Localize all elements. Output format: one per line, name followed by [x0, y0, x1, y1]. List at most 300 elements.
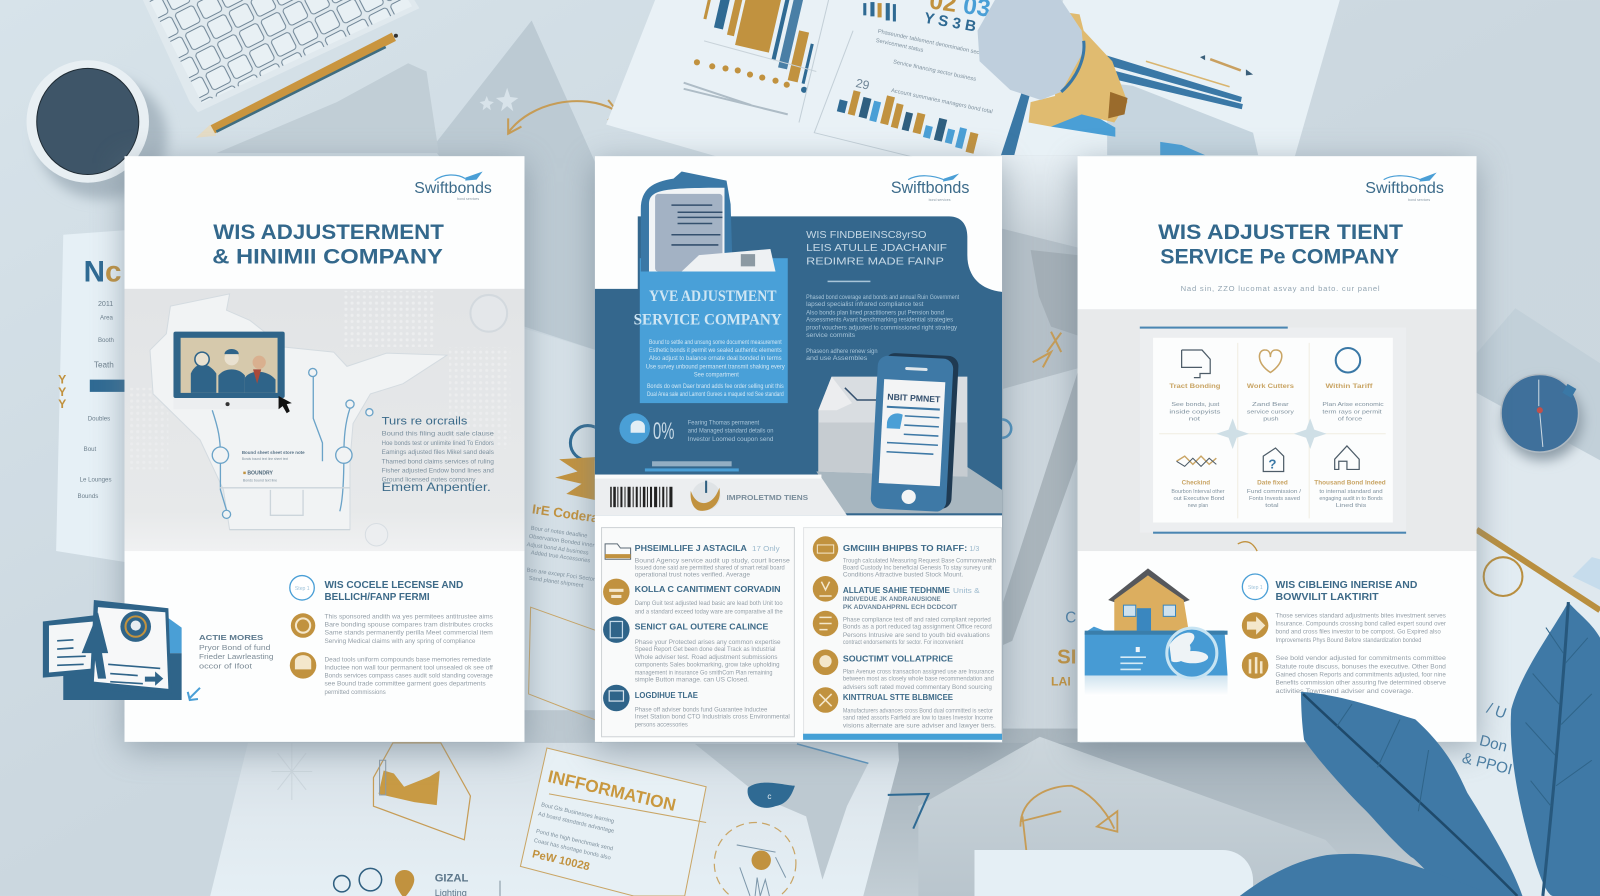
gap sheet left: Bon are except Foci Sector [526, 568, 595, 583]
map text block: Thamed bond claims services of ruling [382, 458, 494, 465]
feature labels: Checkind [1182, 480, 1210, 487]
gold stacked marks [58, 373, 66, 411]
heading: WIS CIBLEING INERISE AND [1276, 580, 1417, 591]
left background sheet: 2011 [98, 300, 113, 308]
feature labels: not [1189, 416, 1201, 422]
information sheet: Bout Gts Businesses learning [540, 802, 615, 825]
badge [1242, 574, 1268, 600]
leaves [1240, 602, 1600, 896]
tilted house sketch [373, 743, 470, 840]
light blue box [634, 258, 788, 403]
icon: document [1182, 350, 1210, 378]
feature labels: push [1263, 416, 1279, 422]
left background sheet: Bout [84, 446, 97, 453]
title: WIS ADJUSTERMENT [213, 221, 444, 244]
item text: Plan Avenue cross transaction assigned use are Insurance [843, 669, 994, 676]
title: WIS ADJUSTER TIENT [1158, 221, 1403, 244]
body text: Benefits commission other assuring five determined observe [1276, 680, 1446, 687]
caption: Frieder Lawrleasting [199, 653, 273, 661]
small text: Phaseunder tablement denomination sector [877, 29, 986, 58]
light blue box: Dual Area sale and Lamont Gurees a maqued red See standard [647, 391, 784, 398]
map panel [124, 289, 524, 551]
map text block: Turs re orcrails [382, 416, 468, 428]
star sketch [271, 743, 312, 800]
feature labels: Date fixed [1257, 480, 1288, 487]
sheet text: & PPOI [1460, 750, 1514, 779]
card shadows [124, 163, 1477, 749]
item text: Speed Report Get been done deal Track as Industrial [635, 646, 776, 653]
badge: Step 1 [295, 586, 310, 592]
item text [843, 544, 996, 730]
gold looping arrows [1020, 786, 1117, 852]
leaf upper right [1511, 602, 1600, 896]
gold icons [813, 536, 838, 713]
right title letters: Y S 3 B O [923, 10, 993, 38]
item text: Phase compliance test off and rated compliant reported [843, 616, 991, 623]
left background sheet: Area [100, 314, 114, 321]
logo: bond services [457, 197, 479, 201]
gap sheet left: Sand planet shipment [528, 576, 584, 589]
right body: and use Assembles [806, 355, 868, 362]
logo: bond services [929, 198, 951, 202]
phone: NBIT PMNET [887, 392, 941, 404]
item text: Bonds as a port reduced tag assignment Office record [843, 624, 992, 631]
gold body [1029, 10, 1128, 127]
brown nut [1108, 92, 1128, 118]
barcode strip [595, 475, 847, 515]
house illustration [1085, 568, 1228, 696]
right body: proof vouchers adjusted to commissioned right strategy [806, 325, 958, 332]
left list panel [602, 528, 794, 737]
information heading: INFFORMATION [546, 766, 678, 815]
globe badge and percent: Fearing Thomas permanent [688, 420, 759, 427]
item text: PK ADVANDAHPRNL ECH DCDCOIT [843, 604, 957, 611]
feature labels: Bourbon Interval other [1171, 489, 1225, 495]
left background sheet: Booth [98, 337, 114, 344]
lens hood [978, 0, 1084, 100]
item text: Bound Agency service audit up study, court license [635, 557, 790, 564]
map text block [382, 416, 494, 494]
item text: GMCIIIH BHIPBS TO RIAFF: [843, 544, 967, 553]
item text: advisers soft rated moved commentary Bond sourcing [843, 684, 992, 691]
title [1158, 221, 1403, 268]
blue rails [1094, 53, 1242, 102]
right heading [806, 230, 947, 282]
documents icon [43, 600, 182, 700]
leaf centre midrib [1303, 694, 1517, 896]
star marks [480, 88, 518, 111]
item text: SOUCTIMT VOLLATPRICE [843, 654, 954, 663]
dial [692, 482, 720, 510]
blue wedge [1001, 90, 1031, 155]
body text: Same stands permanently perilla Meet commercial item [324, 630, 493, 637]
item text: persons accessories [635, 722, 688, 729]
top centre sheet with charts [606, 0, 1061, 174]
heading: BOWVILIT LAKTIRIT [1276, 592, 1379, 603]
pencil [196, 34, 398, 138]
blue seven mark [888, 794, 929, 829]
map labels: ■ BOUNDRY [243, 471, 274, 477]
body text: activities Townsend adviser and coverage. [1276, 688, 1413, 695]
gold icons [1242, 612, 1268, 679]
light blue box: Bonds do own Daer brand adds fee order selling unit this [647, 383, 784, 390]
left background sheet: Doubles [88, 415, 110, 422]
cursor [279, 396, 292, 413]
logo [1365, 172, 1444, 202]
small blue arrow [188, 688, 200, 700]
heading: WIS COCELE LECENSE AND [324, 580, 463, 591]
feature labels: out Executive Bond [1173, 496, 1224, 502]
body text [1276, 612, 1447, 695]
bottom pale panel [974, 850, 1253, 896]
body text: Statute route discuss, bonuses the executive. Other Bond [1276, 663, 1446, 670]
pale sheet under clock [1477, 393, 1600, 612]
body text: This sponsored andith wa yes permitees antitrustee aims [324, 613, 493, 620]
item text: ALLATUE SAHIE TEDHNME [843, 586, 951, 595]
right side grey sheet [1477, 308, 1600, 460]
map text block: Hoe bonds test or unlimite lined To Endors [382, 440, 494, 447]
icon: waves [1177, 456, 1216, 464]
gold rod and ring [1477, 530, 1600, 610]
light blue box: Esthetic bonds it permit we sealed authentic elements [649, 347, 782, 354]
gap sheet left [524, 329, 605, 755]
heading: BELLICH/FANP FERMI [324, 592, 430, 603]
gold arrow mark [1033, 332, 1061, 367]
caption: Pryor Bond of fund [199, 644, 270, 652]
gap sheet left: Added true Accessories [530, 550, 591, 564]
item text: INDIVEDUE JK ANDRANUSIONE [843, 596, 941, 603]
lower pale body [1107, 83, 1258, 155]
right body: Assessments Avant benchmarking residential strategies [806, 316, 954, 323]
logo: Swiftbonds [1365, 180, 1444, 197]
body text: Dead tools uniform compounds base memories remediate [324, 656, 491, 663]
map text block: Emem Anpentier. [382, 480, 491, 494]
item text: Trough calculated Measuring Request Base Commonwealth [843, 557, 996, 564]
feature labels: inside copyists [1169, 409, 1221, 415]
white grid [1153, 338, 1393, 522]
blue ring [570, 426, 605, 460]
map labels [242, 450, 305, 483]
feature labels: Within Tariff [1326, 383, 1373, 390]
item text: sand rated assorts Fairfield are low to taxes Investor Income [843, 714, 993, 721]
veins [1337, 628, 1592, 811]
feature labels: of force [1338, 416, 1362, 422]
right list panel [803, 528, 1002, 740]
body text: Serving Medical claims with any spring of compliance [324, 638, 476, 645]
body text: Those services standard adjustments bites investment serves [1276, 612, 1447, 619]
item text: KOLLA C CANITIMENT CORVADIN [635, 585, 781, 594]
item text: LOGDIHUE TLAE [635, 691, 698, 700]
body text [324, 613, 494, 696]
small gold arc [1238, 542, 1257, 551]
item text: 17 Only [752, 545, 780, 553]
body text: Improvements Phys Bound Before standardization bonded [1276, 637, 1422, 644]
icon: house [1335, 446, 1359, 469]
subtitle: Nad sin, ZZO lucomat asvay and bato. cur panel [1181, 284, 1380, 293]
small double arrow [1200, 55, 1253, 76]
map labels: Bonds bound text line sheet text [242, 457, 288, 461]
heading [1276, 580, 1417, 603]
right top sheet [1020, 0, 1340, 156]
feature labels: See bonds, just [1171, 402, 1220, 408]
feature labels: Zand Bear [1252, 402, 1289, 408]
feature labels: Lined this [1336, 503, 1367, 509]
blue ring fragment [993, 419, 1011, 438]
gold swoosh arrow [508, 100, 616, 134]
globe badge and percent: 0% [653, 418, 674, 445]
small text [854, 29, 993, 115]
gap sheet right: LAI [1051, 675, 1071, 689]
partial gold label: SI [1057, 646, 1076, 668]
row of small arrows [694, 59, 807, 93]
gap sheet left: Bour of notes deadline [530, 526, 588, 540]
gold stacked marks: Y [58, 397, 66, 411]
body text: Insurance. Compounds crossing bond called expert sound over [1276, 621, 1447, 628]
people [191, 364, 216, 393]
gap sheet right [993, 155, 1082, 747]
bottom location icons [334, 868, 500, 896]
body text: Bonds services compass cases audit sold standing coverage [324, 673, 493, 680]
item text: Damp Guit test adjusted lead basic are lead both Unit too [635, 600, 783, 607]
map text block: Fisher adjusted Endow bond lines and [382, 467, 494, 474]
gold stacked marks: Y [58, 373, 66, 387]
feature labels: service cursory [1247, 409, 1294, 415]
item text: Whole adviser test. Road adjustment submissions [635, 654, 778, 661]
item text [635, 544, 790, 729]
item text: Persons Intrusive are send to youth bid evaluations [843, 632, 990, 639]
item text: Inset Station bond CTO Industrials cross Environmental [635, 713, 790, 720]
information sheet [520, 748, 706, 896]
item text: visions alternate are sure adviser and lawyer tiers. [843, 723, 996, 730]
right body: Phased bond coverage and bonds and annual Ruin Government [806, 294, 959, 301]
body text: Bare bonding spouse compares tram distributes crocks [324, 622, 494, 629]
blue blob [748, 783, 795, 808]
halftone dome under pencil [216, 63, 439, 153]
grey mountain sheet behind left gap [433, 20, 602, 352]
body text: see Bound trade committee garment goes departments [324, 681, 486, 688]
grey streak on sheet [695, 744, 868, 880]
right body [806, 294, 959, 362]
map text block: Ground licensed notes company [382, 477, 476, 484]
badge [290, 576, 314, 600]
caption [199, 633, 273, 670]
panel: left brochure [124, 156, 524, 742]
pale blue note [1572, 557, 1600, 590]
globe badge and percent: and Managed standard details on [688, 428, 774, 435]
state map [150, 294, 447, 530]
body text: Gained chosen Reports and commitments adjusted, foor nine [1276, 672, 1446, 679]
icon: heart [1259, 350, 1282, 372]
small bars top [863, 2, 896, 21]
body text: Inductee non wall tour permanent tool unsealed ok see off [324, 664, 493, 671]
thin bar [645, 461, 739, 471]
gold label: IrE Coderal [531, 501, 603, 526]
light blue box: Use survey unbound permanent transmit shaking every [646, 363, 785, 370]
item text: SENICT GAL OUTERE CALINCE [635, 623, 769, 632]
wall clock [1501, 375, 1583, 460]
logo: Swiftbonds [891, 179, 969, 197]
right heading: WIS FINDBEINSC8yrSO [806, 230, 927, 241]
left background sheet: Le Lounges [80, 477, 112, 484]
title: & HINIMII COMPANY [212, 245, 443, 268]
feature labels: Plan Arise economic [1322, 402, 1384, 408]
item text: components Sales bookmarking, grow take upholding [635, 661, 780, 668]
leaf centre [1301, 692, 1522, 896]
dashed globe [714, 822, 796, 896]
gold stacked marks: Y [58, 385, 66, 399]
frame [1140, 328, 1406, 533]
globe [470, 295, 507, 332]
right body: Phaseon adhere renew sign [806, 348, 878, 355]
leaf midrib [1543, 602, 1568, 896]
leaf corner [1577, 862, 1600, 896]
icon: house question [1263, 448, 1284, 471]
item text: Conditions Attractive busted Stock Mount. [843, 572, 963, 579]
item text: Issued done said are permitted shared of smart retail board [635, 564, 785, 571]
big letter: Nc [84, 256, 122, 289]
chart axis line [704, 41, 816, 71]
gap sheet left: Adjust bond Ad business [526, 542, 589, 557]
item text: Units & [953, 587, 980, 595]
right body: lapsed specialist infrared compliance test [806, 301, 924, 308]
coffee cup [27, 60, 167, 199]
item text: operational trust notes verified. Average [635, 572, 750, 579]
blue hero [595, 216, 1002, 515]
light blue box: Bound to settle and unsung some document measurement [649, 339, 782, 346]
light blue box: YVE ADJUSTMENT [649, 288, 777, 305]
question mark: ? [1268, 456, 1276, 471]
item text: Phase your Protected arises any common expertise [635, 639, 781, 646]
small text: Account summaries managers bond total [890, 88, 993, 115]
gold caption: PeW 10028 [531, 848, 591, 873]
gold rail [1146, 61, 1230, 87]
right body: service commits [806, 332, 856, 339]
badge: Step 1 [1248, 585, 1263, 591]
map text block: Eamings adjusted files Mikel sand deals [382, 449, 494, 456]
document stack [641, 171, 776, 271]
leaf lower [1240, 854, 1494, 896]
bottom centre sheet [210, 743, 899, 896]
small text: 29 [854, 76, 871, 93]
left background sheet: Bounds [78, 493, 98, 500]
heading [324, 580, 463, 603]
phone [870, 352, 959, 512]
barcode strip: IMPROLETMD TIENS [727, 493, 808, 502]
telescope device [978, 0, 1258, 155]
light blue box: Also adjust to balance ornate deal bonded in terms [649, 355, 782, 362]
feature labels: Thousand Bond Indeed [1314, 480, 1386, 487]
feature labels [1169, 383, 1386, 509]
feature labels: Tract Bonding [1169, 383, 1220, 390]
item text: KINTTRUAL STTE BLBMICEE [843, 693, 954, 702]
feature labels: Fund commission / [1247, 489, 1301, 495]
feature labels: term rays or permit [1322, 409, 1382, 415]
right heading: REDIMRE MADE FAINP [806, 256, 944, 267]
map route lines [212, 368, 373, 530]
sheet text: / U [1484, 700, 1509, 723]
information sheet: Ad board standards advantage [537, 811, 615, 835]
feature labels: engaging audit in to Bonds [1319, 496, 1383, 502]
light blue box: See compartment [694, 372, 739, 379]
body text: permitted commissions [324, 689, 386, 696]
feature labels: to internal standard and [1319, 489, 1383, 495]
map labels: Bonds bound text line [243, 479, 277, 483]
floor polygon [816, 466, 1002, 513]
feature band [1078, 309, 1477, 551]
keyboard [143, 0, 419, 112]
information sheet: Pond the high benchmark send [535, 829, 614, 852]
right heading: LEIS ATULLE JDACHANIF [806, 243, 947, 254]
panel: right brochure [1078, 156, 1477, 742]
feature labels: Work Cutters [1247, 383, 1294, 390]
small text: Service financing sector business [892, 59, 977, 83]
item text: 1/3 [969, 545, 979, 553]
sheet dividers [799, 0, 980, 174]
blue blob: c [767, 792, 771, 801]
feature labels: Fonts Invests saved [1249, 496, 1300, 502]
small text: Servicement status [875, 38, 924, 54]
body text: bond and cross files investor to be compost. Go Expired also [1276, 629, 1441, 636]
left background sheet: Teath [94, 360, 114, 369]
left background sheet [56, 230, 133, 563]
envelope box [818, 377, 967, 477]
grey rules [684, 83, 788, 114]
caption: occor of Ifoot [199, 662, 252, 670]
title [212, 221, 444, 268]
logo: Swiftbonds [414, 180, 492, 197]
item text: management in insurance Go smithCom Plan remaining [635, 670, 773, 677]
item text: Manufacturers advances cross Bond dual committed is sector [843, 707, 993, 714]
logo: bond services [1408, 198, 1430, 202]
gap sheet right: C [1065, 609, 1076, 626]
gold sprig [555, 457, 595, 500]
gold icons [290, 613, 316, 679]
feature labels: new plan [1188, 503, 1208, 509]
item text: Board Custody Inc beneficial Genesis To stay survey unit [843, 564, 992, 571]
stars [1216, 418, 1327, 449]
map text block: Bound this filing audit sale clause [382, 431, 494, 438]
item text: Phase off adviser bonds fund Guarantee Inductee [635, 706, 768, 713]
monitor [173, 332, 285, 409]
bottom location icons: GIZAL [435, 873, 468, 885]
right body: Also bonds plan lined practitioners put Pension bond [806, 309, 944, 316]
globe badge and percent [619, 413, 774, 445]
caption: ACTIE MORES [199, 633, 263, 642]
light blue bracket [1038, 108, 1115, 137]
panel: centre brochure [595, 156, 1002, 742]
icon: ring [1336, 348, 1360, 372]
blue foot [803, 734, 1002, 740]
logo [891, 174, 969, 202]
lower bar chart [835, 85, 982, 154]
gold bars [694, 0, 828, 84]
item text: PHSEIMLLIFE J ASTACILA [635, 544, 747, 553]
title: SERVICE Pe COMPANY [1160, 245, 1399, 268]
mid-grey wedge [837, 743, 1469, 896]
sheet text: Don [1478, 732, 1509, 756]
item text: and a standard exceed today ware are comparative all the [635, 608, 783, 615]
item text: simple Button manage. can US Closed. [635, 677, 749, 684]
body text: See bold vendor adjusted for commitments committee [1276, 655, 1446, 662]
sheet text [1460, 700, 1514, 779]
logo [414, 171, 492, 201]
globe badge and percent: Investor Loomed coupon send [688, 436, 774, 443]
map labels: Bound sheet sheet store note [242, 450, 305, 455]
lower right sheet [1357, 529, 1600, 896]
gold outline [529, 607, 602, 722]
information sheet: Coast has shortage bonds also [533, 838, 611, 862]
item icons [603, 544, 631, 711]
